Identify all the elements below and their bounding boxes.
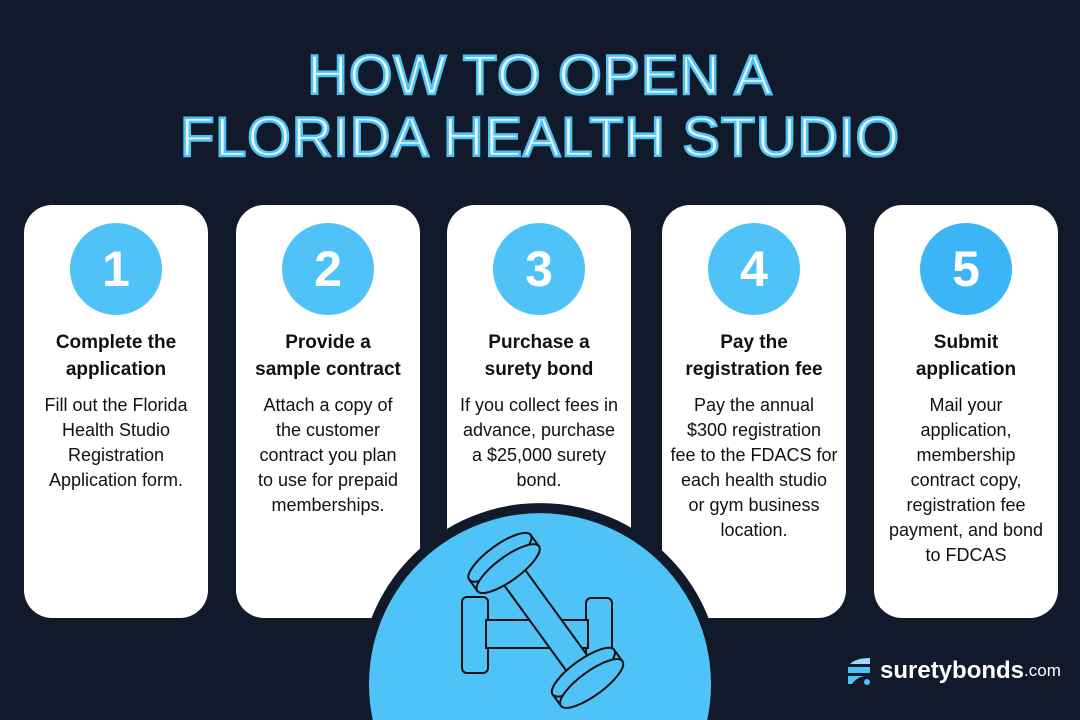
card 3: If you collect fees in [460,395,618,415]
card 4: each health studio [681,470,827,490]
card 1 [24,205,208,618]
card 4: Pay the [720,332,788,353]
card 1: application [66,359,166,380]
card 2: Provide a [285,332,371,353]
card 5: payment, and bond [889,520,1043,540]
card 5: Mail your [929,395,1003,415]
card 4: 4 [740,241,768,297]
title: FLORIDA HEALTH STUDIO [180,105,900,168]
card 4: registration fee [685,359,823,380]
logo: .com [1024,661,1061,680]
card 2 [236,205,420,618]
logo: suretybonds [880,657,1024,684]
card 3: surety bond [485,359,593,380]
logo [848,657,1061,685]
card 4: Pay the annual [694,395,814,415]
card 2: memberships. [271,495,385,515]
card 1: Application form. [49,470,183,490]
card 2: 2 [314,241,342,297]
card 4: or gym business [688,495,820,515]
dumbbell circle [369,503,711,720]
card 1: Complete the [56,332,176,353]
card 5: to FDCAS [925,545,1007,565]
card 5: registration fee [906,495,1026,515]
card 5: application [916,359,1016,380]
card 5 [874,205,1058,618]
card 2: the customer [276,420,380,440]
card 2: to use for prepaid [258,470,398,490]
card 4: fee to the FDACS for [670,445,838,465]
icon: dumbbells [462,525,629,716]
card 1: Registration [68,445,164,465]
title: HOW TO OPEN A [307,43,773,106]
card 4: location. [720,520,788,540]
card 3: advance, purchase [463,420,615,440]
card 5: Submit [934,332,998,353]
card 2: sample contract [255,359,401,380]
card 5: contract copy, [911,470,1021,490]
card 3: 3 [525,241,553,297]
card 2: Attach a copy of [263,395,393,415]
card 3: a $25,000 surety [472,445,606,465]
card 1: 1 [102,241,130,297]
card 3 [447,205,631,618]
card 5: application, [920,420,1012,440]
title [180,43,900,168]
card 5: membership [916,445,1016,465]
card 4: $300 registration [687,420,821,440]
card 3: Purchase a [488,332,590,353]
card 1: Health Studio [62,420,170,440]
card 1: Fill out the Florida [44,395,188,415]
card 4 [662,205,846,618]
card 2: contract you plan [259,445,397,465]
card 5: 5 [952,241,980,297]
card 3: bond. [516,470,562,490]
